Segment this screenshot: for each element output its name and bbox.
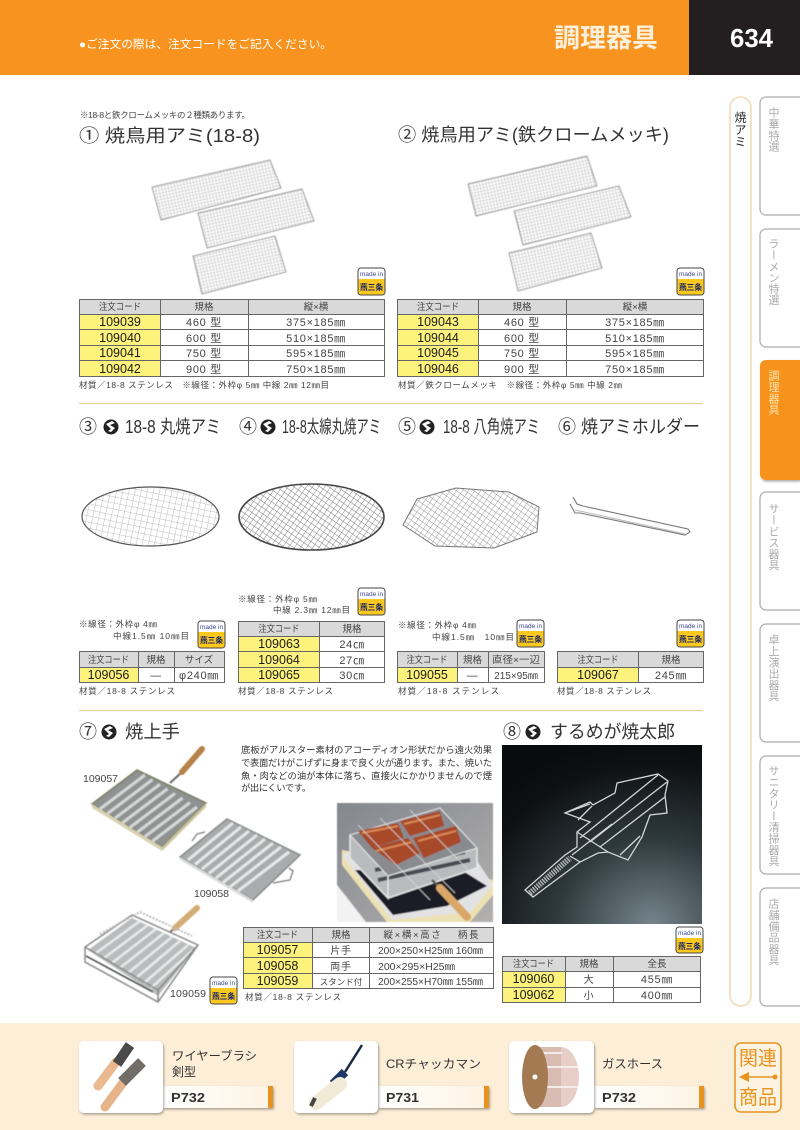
table 8: 455㎜ bbox=[641, 974, 673, 986]
table 1: 510×185㎜ bbox=[286, 333, 346, 345]
heading 5 bbox=[398, 417, 540, 437]
table 1: 600 型 bbox=[186, 331, 222, 345]
badge: made in 燕三条 bbox=[210, 977, 237, 1004]
product 2 bbox=[397, 125, 704, 390]
footer: related products bbox=[0, 1023, 800, 1130]
product 4 bbox=[238, 417, 385, 696]
spec note 4 bbox=[238, 594, 350, 615]
table 8: 400㎜ bbox=[641, 990, 673, 1002]
table 8: 規格 bbox=[579, 958, 599, 970]
photo: grilling eel on stove bbox=[337, 803, 493, 922]
table 8: 注文コード bbox=[513, 958, 554, 970]
spec note 3 bbox=[79, 619, 189, 641]
category title: 調理器具 bbox=[554, 23, 658, 53]
table 2: 注文コード bbox=[417, 301, 459, 313]
table 1: 750 型 bbox=[186, 346, 222, 360]
heading 4: ④ bbox=[239, 417, 257, 437]
description: 底板がアルスター素材のアコーディオン形状だから遠火効果 bbox=[241, 744, 492, 755]
tab: 店舗備品器具 bbox=[760, 888, 800, 1006]
table 5 bbox=[397, 651, 544, 682]
material note 1: 材質／18-8 ステンレス ※線径：外枠φ 5㎜ 中線 2㎜ 12㎜目 bbox=[79, 380, 329, 390]
material note 3: 材質／18-8 ステンレス bbox=[79, 686, 175, 696]
heading 5: 18-8 八角焼アミ bbox=[443, 417, 540, 437]
related item: CR lighter: P731 bbox=[386, 1090, 419, 1105]
badge: made in 燕三条: 燕三条 bbox=[360, 282, 383, 292]
table 1: 規格 bbox=[194, 301, 214, 313]
table 5: — bbox=[467, 670, 478, 682]
table 5: 注文コード bbox=[406, 654, 448, 666]
spec note 3: ※線径：外枠φ 4㎜ bbox=[79, 619, 157, 629]
heading 3: ③ bbox=[79, 417, 97, 437]
related item: wire brush: P732 bbox=[171, 1090, 205, 1105]
tab: ラーメン特選: ラーメン特選 bbox=[767, 238, 780, 306]
table 2: 595×185㎜ bbox=[605, 348, 665, 360]
page number: 634 bbox=[730, 23, 774, 53]
badge: made in 燕三条: 燕三条 bbox=[679, 634, 702, 644]
product 6 bbox=[557, 417, 704, 696]
spec note 3: 中線1.5㎜ 10㎜目 bbox=[113, 631, 189, 641]
badge: made in 燕三条: made in bbox=[212, 980, 235, 987]
heading 6: ⑥ bbox=[558, 417, 576, 437]
photo: round grill bbox=[82, 487, 219, 546]
table 7: 縦×横×高さ 柄長 bbox=[384, 929, 479, 941]
table 3 bbox=[79, 651, 224, 682]
tab: 調理器具 active: 調理器具 bbox=[767, 370, 780, 415]
badge: made in 燕三条: 燕三条 bbox=[360, 602, 383, 612]
badge: made in 燕三条 bbox=[517, 620, 544, 647]
spec note 4: 中線 2.3㎜ 12㎜目 bbox=[273, 605, 350, 615]
heading 3 bbox=[79, 417, 221, 437]
spec note 5: ※線径：外枠φ 4㎜ bbox=[398, 620, 476, 630]
photo: rectangular grills 1 bbox=[152, 160, 314, 294]
badge: made in 燕三条: 燕三条 bbox=[678, 941, 701, 951]
related item: wire brush: ワイヤーブラシ bbox=[172, 1048, 257, 1063]
table 7: スタンド付 bbox=[320, 977, 363, 987]
table 2: 規格 bbox=[512, 301, 532, 313]
heading 1: ① 焼鳥用アミ(18-8) bbox=[79, 126, 260, 146]
table 8: 109062 bbox=[513, 988, 554, 1002]
table 4 bbox=[238, 621, 385, 682]
table 1: 109042 bbox=[99, 362, 141, 376]
table 1 bbox=[79, 299, 385, 376]
photo: rectangular grills 2 bbox=[468, 156, 631, 291]
badge: made in 燕三条: made in bbox=[200, 624, 223, 631]
table 1: 900 型 bbox=[186, 362, 222, 376]
material note 5: 材質／18-8 ステンレス bbox=[398, 686, 499, 696]
table 7: 片手 bbox=[330, 944, 352, 957]
table 3: 規格 bbox=[146, 654, 166, 666]
heading 6: 焼アミホルダー bbox=[581, 417, 700, 437]
tab: 調理器具 active bbox=[760, 360, 800, 480]
table 7: 109057 bbox=[257, 943, 298, 957]
table 8: 大 bbox=[584, 973, 594, 986]
table 7: 200×250×H25㎜ 160㎜ bbox=[378, 946, 483, 957]
tab: 中華特選 bbox=[760, 97, 800, 215]
heading 4 bbox=[239, 417, 381, 437]
badge: made in 燕三条: made in bbox=[360, 271, 383, 278]
heading 8: ⑧ bbox=[503, 722, 521, 742]
badge: made in 燕三条 bbox=[358, 268, 385, 295]
material note 2: 材質／鉄クロームメッキ ※線径：外枠φ 5㎜ 中線 2㎜ bbox=[398, 380, 622, 390]
related item: gas hose bbox=[509, 1041, 704, 1113]
related products mark bbox=[735, 1043, 781, 1112]
product 1 bbox=[79, 126, 385, 390]
table 6: 注文コード bbox=[578, 654, 618, 666]
related item: wire brush: 剣型 bbox=[172, 1065, 196, 1079]
description: が出にくいです。 bbox=[241, 782, 311, 793]
heading 5: ⑤ bbox=[398, 417, 416, 437]
related products mark: 商品 bbox=[739, 1086, 777, 1109]
table 2: 375×185㎜ bbox=[605, 317, 665, 329]
badge: made in 燕三条: 燕三条 bbox=[519, 634, 542, 644]
table 4: 30㎝ bbox=[339, 670, 365, 682]
tab: 店舗備品器具: 店舗備品器具 bbox=[767, 898, 780, 966]
badge: made in 燕三条: made in bbox=[678, 930, 701, 937]
material note 4: 材質／18-8 ステンレス bbox=[238, 686, 333, 696]
subcategory pill bbox=[730, 97, 751, 1006]
table 7: 109058 bbox=[257, 959, 298, 973]
photo: stand pan bbox=[85, 908, 198, 1002]
code label 109057: 109057 bbox=[83, 773, 118, 785]
table 2: 600 型 bbox=[504, 331, 540, 345]
photo: squid grill bbox=[502, 745, 702, 924]
material note 6: 材質／18-8 ステンレス bbox=[557, 686, 651, 696]
table 4: 24㎝ bbox=[339, 639, 365, 651]
table 7: 規格 bbox=[331, 929, 351, 941]
table 8: 109060 bbox=[513, 972, 554, 986]
subcategory pill: 焼アミ bbox=[733, 111, 747, 148]
product 8 bbox=[502, 722, 703, 1002]
heading 7: 焼上手 bbox=[125, 722, 180, 742]
related item: gas hose: P732 bbox=[602, 1090, 636, 1105]
table 1: 109039 bbox=[99, 315, 141, 329]
related item: CR lighter bbox=[294, 1041, 489, 1113]
photo: octagonal grill bbox=[403, 488, 539, 548]
table 5: 215×95㎜ bbox=[494, 671, 538, 682]
tab: 卓上演出器具 bbox=[760, 624, 800, 742]
related products mark: 関連 bbox=[739, 1047, 777, 1070]
table 4: 109063 bbox=[258, 637, 300, 651]
table 2 bbox=[397, 299, 704, 376]
table 8: 全長 bbox=[647, 958, 667, 970]
table 1: 注文コード bbox=[99, 301, 141, 313]
table 2: 750 型 bbox=[504, 346, 540, 360]
table 8 bbox=[502, 956, 701, 1002]
table 2: 510×185㎜ bbox=[605, 333, 665, 345]
table 2: 109045 bbox=[417, 346, 459, 360]
related item: wire brush bbox=[79, 1041, 273, 1113]
table 8: 小 bbox=[584, 990, 594, 1002]
spec note 4: ※線径：外枠φ 5㎜ bbox=[238, 594, 317, 604]
side navigation bbox=[730, 97, 800, 1006]
heading 7: ⑦ bbox=[79, 722, 97, 742]
table 1: 375×185㎜ bbox=[286, 317, 346, 329]
table 7: 109059 bbox=[257, 974, 298, 988]
table 2: 750×185㎜ bbox=[605, 364, 665, 376]
table 2: 460 型 bbox=[504, 315, 540, 329]
tab: 卓上演出器具: 卓上演出器具 bbox=[767, 634, 780, 702]
heading 8: するめが焼太郎 bbox=[550, 722, 675, 742]
spec note 5: 中線1.5㎜ 10㎜目 bbox=[432, 632, 514, 642]
table 6: 規格 bbox=[661, 654, 681, 666]
material note 7: 材質／18-8 ステンレス bbox=[245, 992, 341, 1002]
table 3: サイズ bbox=[185, 654, 214, 666]
top note: ※18-8と鉄クロームメッキの２種類あります。 bbox=[80, 110, 250, 120]
description: で表面だけがこげずに身まで良く火が通ります。また、焼いた bbox=[241, 757, 492, 768]
tab: 中華特選: 中華特選 bbox=[767, 107, 780, 152]
table 7: 注文コード bbox=[257, 929, 298, 941]
photo: two-handle pan bbox=[180, 819, 300, 903]
heading 2: ② 焼鳥用アミ(鉄クロームメッキ) bbox=[398, 125, 669, 145]
badge: made in 燕三条 bbox=[677, 268, 704, 295]
table 6: 245㎜ bbox=[655, 670, 687, 682]
tab: サービス器具: サービス器具 bbox=[767, 503, 780, 571]
table 7 bbox=[243, 927, 494, 988]
badge: made in 燕三条: 燕三条 bbox=[679, 282, 702, 292]
table 1: 750×185㎜ bbox=[286, 364, 346, 376]
table 5: 規格 bbox=[463, 654, 482, 666]
table 1: 縦×横 bbox=[304, 301, 329, 313]
badge: made in 燕三条: made in bbox=[360, 591, 383, 598]
code label 109059: 109059 bbox=[170, 988, 206, 1000]
table 2: 900 型 bbox=[504, 362, 540, 376]
heading 3: 18-8 丸焼アミ bbox=[125, 417, 221, 437]
photo: single-handle pan bbox=[92, 749, 206, 851]
related item: CR lighter: CRチャッカマン bbox=[386, 1057, 481, 1071]
table 4: 109064 bbox=[258, 653, 300, 667]
table 1: 595×185㎜ bbox=[286, 348, 346, 360]
table 7: 200×255×H70㎜ 155㎜ bbox=[378, 977, 483, 988]
spec note 5 bbox=[398, 620, 514, 642]
table 3: — bbox=[150, 670, 162, 682]
table 3: 109056 bbox=[88, 668, 129, 682]
description bbox=[241, 744, 492, 793]
photo: holder bbox=[570, 497, 690, 535]
badge: made in 燕三条: made in bbox=[519, 623, 542, 630]
table 4: 注文コード bbox=[258, 623, 300, 635]
table 2: 縦×横 bbox=[623, 301, 648, 313]
heading 4: 18-8太線丸焼アミ bbox=[282, 417, 381, 437]
table 2: 109043 bbox=[417, 315, 459, 329]
product 5 bbox=[397, 417, 544, 696]
table 1: 109041 bbox=[99, 346, 141, 360]
table 1: 109040 bbox=[99, 331, 141, 345]
order note: ●ご注文の際は、注文コードをご記入ください。 bbox=[79, 37, 332, 51]
badge: made in 燕三条 bbox=[198, 621, 225, 648]
related item: gas hose: ガスホース bbox=[602, 1057, 663, 1071]
badge: made in 燕三条: 燕三条 bbox=[200, 635, 223, 645]
product 3 bbox=[79, 417, 225, 696]
tab: サニタリー清掃器具 bbox=[760, 756, 800, 874]
heading 7 bbox=[79, 722, 180, 742]
table 3: 注文コード bbox=[88, 654, 129, 666]
badge: made in 燕三条: made in bbox=[679, 623, 702, 630]
product 7 bbox=[79, 722, 494, 1004]
table 2: 109046 bbox=[417, 362, 459, 376]
table 1: 460 型 bbox=[186, 315, 222, 329]
tab: サービス器具 bbox=[760, 492, 800, 610]
tab: ラーメン特選 bbox=[760, 229, 800, 347]
table 6 bbox=[557, 651, 704, 682]
photo: thick wire round grill bbox=[239, 484, 384, 550]
badge: made in 燕三条 bbox=[358, 588, 385, 615]
table 3: φ240㎜ bbox=[179, 670, 219, 682]
table 5: 直径×一辺 bbox=[492, 654, 541, 666]
table 7: 200×295×H25㎜ bbox=[378, 962, 455, 973]
code label 109058: 109058 bbox=[194, 888, 229, 900]
badge: made in 燕三条: 燕三条 bbox=[212, 991, 235, 1001]
table 2: 109044 bbox=[417, 331, 459, 345]
badge: made in 燕三条: made in bbox=[679, 271, 702, 278]
description: 魚・肉などの油が本体に落ち、直接火にかかりませんので煙 bbox=[241, 770, 492, 781]
badge: made in 燕三条 bbox=[676, 927, 703, 953]
table 4: 27㎝ bbox=[339, 655, 365, 667]
table 5: 109055 bbox=[406, 668, 448, 682]
tab: サニタリー清掃器具: サニタリー清掃器具 bbox=[767, 765, 780, 867]
table 4: 109065 bbox=[258, 668, 300, 682]
header band bbox=[0, 0, 800, 75]
table 4: 規格 bbox=[342, 623, 362, 635]
table 7: 両手 bbox=[330, 960, 352, 973]
badge: made in 燕三条 bbox=[677, 620, 704, 647]
table 6: 109067 bbox=[577, 668, 619, 682]
